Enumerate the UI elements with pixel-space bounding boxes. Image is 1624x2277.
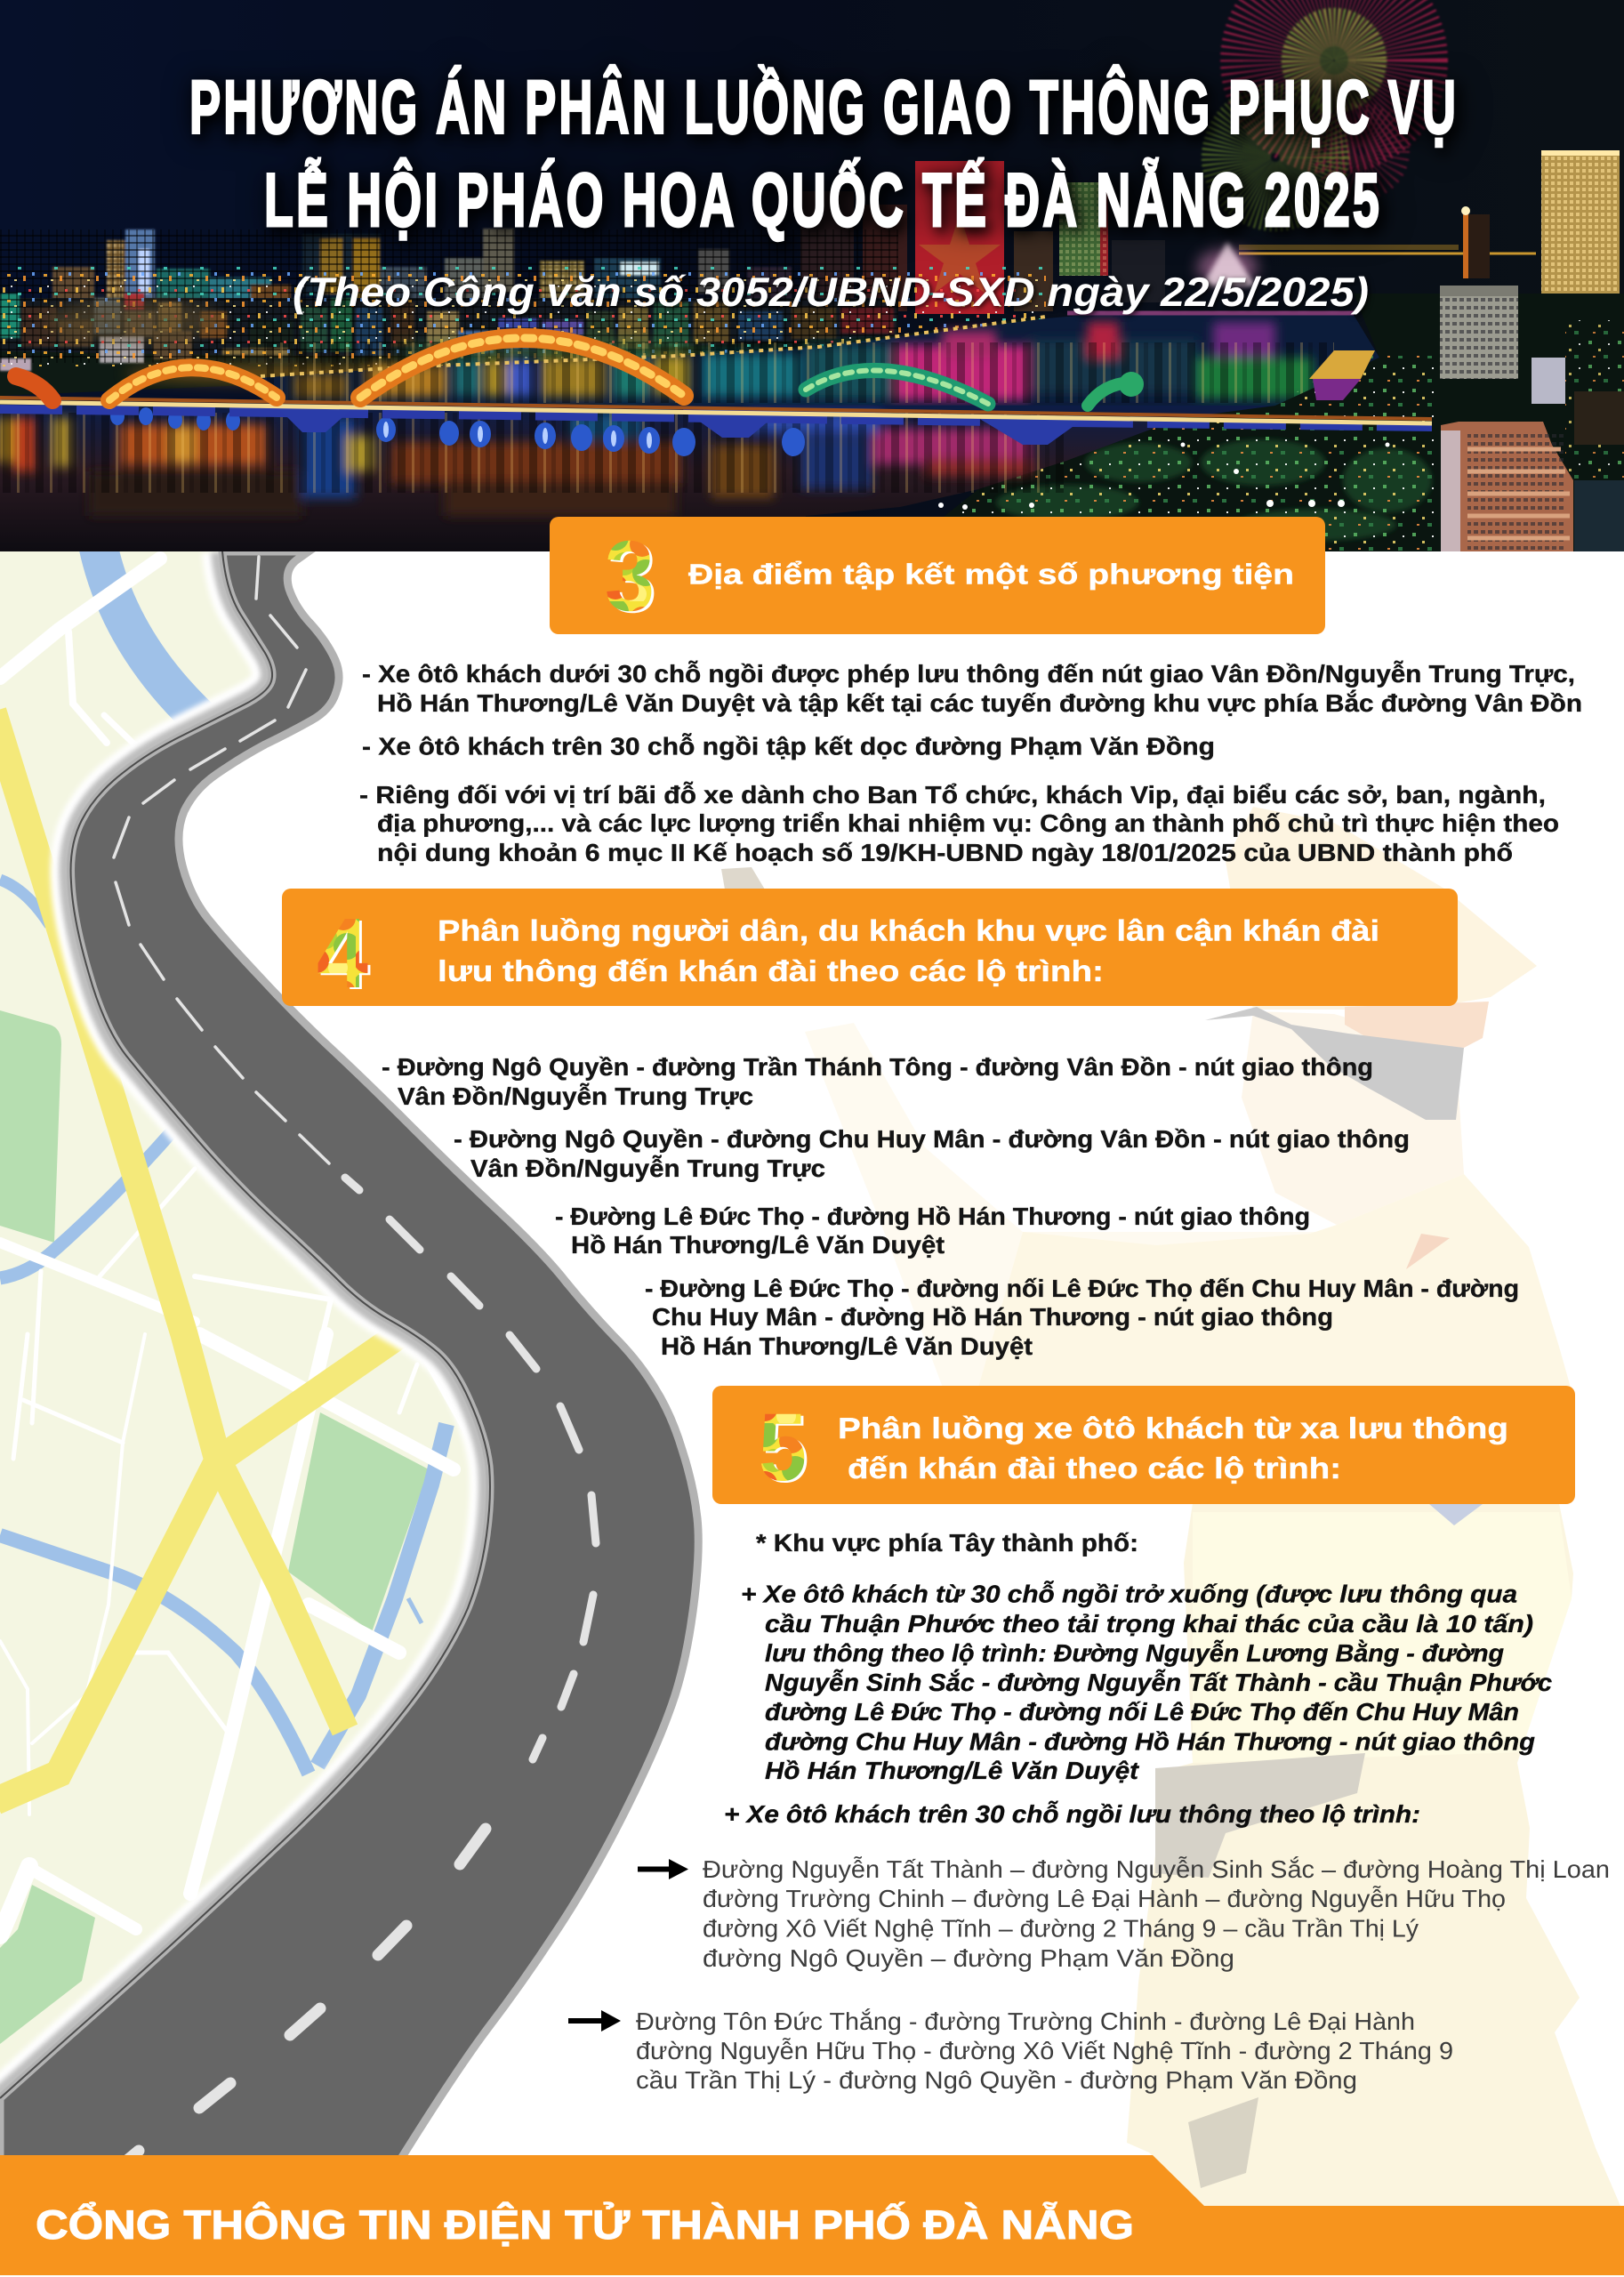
officer cap band — [1345, 1002, 1489, 1048]
section 5 route for coaches up to 30 seats — [741, 1580, 1552, 1784]
boat pagoda — [1309, 350, 1375, 379]
road side shadow — [0, 551, 490, 2098]
section 4 heading bar: lưu thông đến khán đài theo các lộ trình: — [438, 954, 1104, 987]
fountain burst — [1202, 242, 1255, 286]
tall towers skyline — [800, 150, 1624, 318]
winding road — [0, 551, 698, 2164]
right side buildings — [900, 286, 1624, 551]
lower river — [0, 405, 1275, 551]
section 5 over 30 seats heading: + Xe ôtô khách trên 30 chỗ ngồi lưu thông theo lộ trình: — [724, 1800, 1420, 1828]
first route text: đường Trường Chinh – đường Lê Đại Hành – đường Nguyễn Hữu Thọ — [703, 1885, 1506, 1912]
map parks — [0, 1010, 429, 2044]
section 5 heading bar — [712, 1386, 1575, 1504]
section 3 body text: - Xe ôtô khách trên 30 chỗ ngồi tập kết dọc đường Phạm Văn Đồng — [362, 733, 1215, 760]
lower river streaks — [0, 413, 1067, 493]
upper river with reflections — [258, 311, 1379, 406]
officer face mask — [1205, 1007, 1464, 1120]
section 3 body text: - Riêng đối với vị trí bãi đỗ xe dành cho Ban Tổ chức, khách Vip, đại biểu các sở, ban, ngành, — [359, 781, 1546, 809]
map rivers — [0, 544, 446, 1774]
trees dark — [996, 439, 1432, 541]
road wide centre dashes — [345, 1178, 596, 1759]
green-lit tower — [1059, 182, 1100, 276]
map white streets — [0, 559, 454, 1935]
golden hotel tower — [1541, 150, 1620, 302]
officer belt — [1155, 1753, 1365, 1878]
section 4 route list: Chu Huy Mân - đường Hồ Hán Thương - nút giao thông — [652, 1303, 1333, 1331]
low-rise city band — [0, 229, 1046, 396]
footer banner — [0, 2155, 1624, 2275]
header subtitle: (Theo Công văn số 3052/UBND-SXD ngày 22/5/2025) — [293, 269, 1369, 315]
dragon bridge arches — [16, 338, 1144, 406]
section 5 route for coaches up to 30 seats: đường Chu Huy Mân - đường Hồ Hán Thương - nút giao thông — [765, 1727, 1535, 1756]
officer cap — [1226, 807, 1537, 1010]
section 4 heading text: Phân luồng người dân, du khách khu vực lân cận khán đài — [438, 914, 1379, 946]
header title — [189, 64, 1459, 243]
section 5 route for coaches up to 30 seats: đường Lê Đức Thọ - đường nối Lê Đức Thọ đến Chu Huy Mân — [765, 1698, 1519, 1726]
night sky — [0, 0, 1624, 551]
map yellow highways — [0, 712, 400, 1801]
far river bridge — [1067, 311, 1354, 315]
road thin centre dashes — [114, 557, 329, 1163]
section 3 heading bar — [550, 517, 1325, 634]
section 5 route for coaches up to 30 seats: + Xe ôtô khách từ 30 chỗ ngồi trở xuống (được lưu thông qua — [741, 1580, 1517, 1608]
officer chest highlight — [1193, 1512, 1572, 1763]
officer holster — [1188, 2097, 1258, 2188]
first route text — [703, 1855, 1610, 1972]
officer uniform lower — [1127, 1503, 1620, 2206]
blue bridge lights on water — [110, 407, 805, 456]
officer baton — [721, 867, 765, 889]
section 4 route list: Vân Đồn/Nguyễn Trung Trực — [470, 1155, 825, 1182]
bridge deck and piers — [0, 398, 1432, 445]
city lights scatter — [0, 267, 1046, 366]
footer text: CỔNG THÔNG TIN ĐIỆN TỬ THÀNH PHỐ ĐÀ NẴNG — [36, 2201, 1134, 2248]
white building — [1532, 358, 1565, 404]
number 5: 5 — [759, 1393, 807, 1501]
section 3 body text: nội dung khoản 6 mục II Kế hoạch số 19/KH-UBND ngày 18/01/2025 của UBND thành phố — [377, 839, 1513, 866]
section 3 body text: - Xe ôtô khách dưới 30 chỗ ngồi được phép lưu thông đến nút giao Vân Đồn/Nguyễn Trung Trực, — [362, 660, 1575, 688]
section 4 route list: - Đường Lê Đức Thọ - đường nối Lê Đức Thọ đến Chu Huy Mân - đường — [645, 1275, 1519, 1302]
officer collar — [1429, 1504, 1483, 1525]
section 5 heading bar: đến khán đài theo các lộ trình: — [848, 1452, 1341, 1484]
arrow: second route — [568, 2010, 621, 2032]
lit promenade — [261, 317, 1046, 376]
background illustration: traffic officer — [721, 807, 1620, 2206]
section 4 route list — [382, 1053, 1519, 1360]
river bank right — [900, 294, 1624, 551]
first route text: đường Xô Viết Nghệ Tĩnh – đường 2 Tháng 9 – cầu Trần Thị Lý — [703, 1914, 1419, 1943]
section 4 route list: - Đường Ngô Quyền - đường Trần Thánh Tông - đường Vân Đồn - nút giao thông — [382, 1053, 1373, 1081]
section 5 west area heading: * Khu vực phía Tây thành phố: — [756, 1529, 1138, 1557]
section 3 body text: Hồ Hán Thương/Lê Văn Duyệt và tập kết tại các tuyến đường khu vực phía Bắc đường Vân Đồn — [377, 689, 1582, 717]
section 5 route for coaches up to 30 seats: cầu Thuận Phước theo tải trọng khai thác của cầu là 10 tấn) — [765, 1610, 1533, 1637]
far bridge lights — [1239, 253, 1536, 254]
section 3 heading text: Địa điểm tập kết một số phương tiện — [688, 559, 1294, 591]
road surface — [0, 551, 698, 2161]
section 4 route list: - Đường Ngô Quyền - đường Chu Huy Mân - đường Vân Đồn - nút giao thông — [454, 1125, 1410, 1153]
officer raised arm — [805, 1023, 1334, 1388]
header night photo: Da Nang city and Dragon Bridge — [0, 0, 1624, 551]
first route text: Đường Nguyễn Tất Thành – đường Nguyễn Sinh Sắc – đường Hoàng Thị Loan — [703, 1855, 1610, 1883]
officer uniform upper — [978, 1174, 1571, 1388]
lower river reflections — [0, 412, 1032, 516]
grey hotel — [1440, 290, 1518, 379]
city light glow — [44, 249, 1258, 382]
section 3 body text: địa phương,... và các lực lượng triển khai nhiệm vụ: Công an thành phố chủ trì thực hiện theo — [377, 809, 1559, 837]
section 4 route list: Vân Đồn/Nguyễn Trung Trực — [398, 1082, 753, 1110]
riverside land lights — [938, 443, 1389, 510]
section 4 heading bar — [282, 889, 1458, 1009]
background city map — [0, 551, 471, 2072]
second route text — [636, 2007, 1453, 2094]
section 4 route list: Hồ Hán Thương/Lê Văn Duyệt — [661, 1332, 1033, 1360]
fireworks — [1236, 0, 1398, 197]
officer badge — [1406, 1234, 1450, 1269]
number 3: 3 — [605, 520, 655, 632]
brown hotel — [1441, 422, 1573, 551]
land light scatter — [900, 356, 1441, 551]
arrow: first route — [638, 1859, 688, 1879]
section 4 route list: Hồ Hán Thương/Lê Văn Duyệt — [571, 1231, 945, 1259]
section 5 heading text: Phân luồng xe ôtô khách từ xa lưu thông — [838, 1412, 1508, 1444]
left and central city buildings — [52, 228, 792, 298]
section 3 body text — [359, 660, 1582, 866]
section 5 route for coaches up to 30 seats: Hồ Hán Thương/Lê Văn Duyệt — [765, 1757, 1140, 1784]
road inner edge line — [0, 551, 490, 2098]
first route text: đường Ngô Quyền – đường Phạm Văn Đồng — [703, 1944, 1234, 1972]
number 4: 4 — [317, 897, 368, 1009]
distant dark towers — [800, 191, 854, 307]
light mast — [1468, 214, 1490, 278]
second route text: cầu Trần Thị Lý - đường Ngô Quyền - đường Phạm Văn Đồng — [636, 2066, 1357, 2094]
officer face — [1242, 1011, 1464, 1225]
flag-lit red tower — [915, 161, 1004, 314]
building window texture — [0, 229, 898, 363]
section 5 route for coaches up to 30 seats: lưu thông theo lộ trình: Đường Nguyễn Lương Bằng - đường — [765, 1639, 1504, 1667]
section 4 route list: - Đường Lê Đức Thọ - đường Hồ Hán Thương - nút giao thông — [555, 1203, 1310, 1230]
second route text: đường Nguyễn Hữu Thọ - đường Xô Viết Nghệ Tĩnh - đường 2 Tháng 9 — [636, 2037, 1453, 2064]
upper river streaks — [267, 342, 1334, 403]
second route text: Đường Tôn Đức Thắng - đường Trường Chinh - đường Lê Đại Hành — [636, 2007, 1415, 2035]
section 5 route for coaches up to 30 seats: Nguyễn Sinh Sắc - đường Nguyễn Tất Thành - cầu Thuận Phước — [765, 1669, 1552, 1696]
